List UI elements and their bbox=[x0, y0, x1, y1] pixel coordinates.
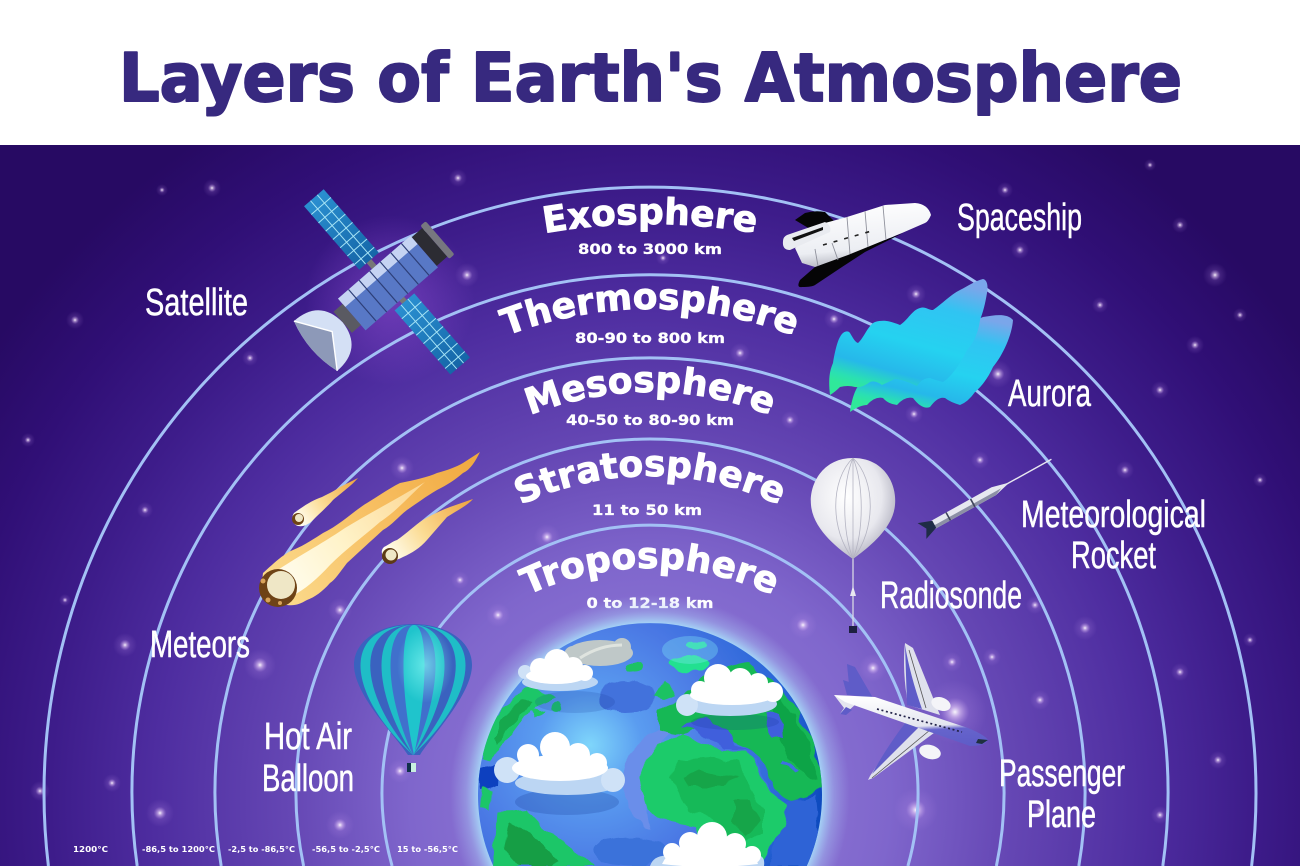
icon: small meteor lower bbox=[382, 499, 473, 564]
cloud: upper left bbox=[518, 649, 598, 691]
label: passenger plane: Plane bbox=[1027, 794, 1096, 836]
icon: aurora bbox=[829, 279, 1013, 412]
temperature scale bbox=[73, 845, 458, 854]
label: meteorological rocket bbox=[1021, 494, 1206, 577]
layer: exosphere: 800 to 3000 km bbox=[578, 242, 722, 258]
icon: large meteor bbox=[259, 452, 480, 607]
icon: hot air balloon bbox=[354, 624, 472, 772]
label: meteorological rocket: Meteorological bbox=[1021, 494, 1206, 536]
label: hot air balloon: Hot Air bbox=[264, 716, 352, 758]
label: aurora: Aurora bbox=[1008, 373, 1092, 415]
layer: troposphere: 0 to 12-18 km bbox=[586, 596, 714, 612]
layer: mesosphere: 40-50 to 80-90 km bbox=[566, 413, 734, 429]
layer: mesosphere: Mesosphere bbox=[524, 366, 773, 414]
title: Layers of Earth's Atmosphere bbox=[119, 39, 1182, 117]
temperature scale: -86,5 to 1200°C bbox=[142, 845, 215, 854]
label: passenger plane: Passenger bbox=[999, 753, 1125, 795]
temperature scale: -56,5 to -2,5°C bbox=[312, 845, 380, 854]
temperature scale: 15 to -56,5°C bbox=[397, 845, 458, 854]
atmosphere layer rings bbox=[44, 187, 1256, 866]
cloud: grey bbox=[564, 638, 633, 666]
cloud: bottom bbox=[650, 822, 764, 866]
layer: stratosphere: 11 to 50 km bbox=[592, 503, 702, 519]
layer: thermosphere: 80-90 to 800 km bbox=[575, 331, 725, 347]
label: meteors: Meteors bbox=[150, 624, 250, 666]
cloud: upper right bbox=[676, 664, 783, 716]
label: satellite: Satellite bbox=[145, 282, 248, 324]
label: hot air balloon bbox=[262, 716, 354, 800]
earth surface bbox=[478, 636, 825, 866]
temperature scale: 1200°C bbox=[73, 845, 108, 854]
label: hot air balloon: Balloon bbox=[262, 758, 354, 800]
icon: spaceship bbox=[783, 203, 931, 287]
label: meteorological rocket: Rocket bbox=[1071, 535, 1156, 577]
temperature scale: -2,5 to -86,5°C bbox=[228, 845, 295, 854]
label: passenger plane bbox=[999, 753, 1125, 836]
icon: radiosonde balloon bbox=[811, 458, 895, 633]
layer: exosphere bbox=[543, 196, 756, 258]
layer: stratosphere: Stratosphere bbox=[514, 452, 783, 504]
label: radiosonde: Radiosonde bbox=[880, 575, 1022, 617]
layer: thermosphere: Thermosphere bbox=[497, 286, 797, 334]
earth glow halo bbox=[450, 595, 850, 866]
earth ocean bbox=[478, 623, 822, 866]
star field bbox=[21, 159, 1267, 839]
white title band bbox=[0, 0, 1300, 145]
layer: troposphere: Troposphere bbox=[516, 542, 776, 594]
icon: passenger plane bbox=[834, 643, 988, 780]
icon: earth globe bbox=[450, 595, 850, 866]
icon: meteorological rocket bbox=[918, 451, 1056, 539]
icon: satellite bbox=[238, 152, 512, 432]
icon: small meteor upper bbox=[292, 478, 358, 526]
label: spaceship: Spaceship bbox=[957, 197, 1082, 239]
cloud: middle left bbox=[494, 732, 625, 795]
layer: exosphere: Exosphere bbox=[543, 196, 756, 233]
